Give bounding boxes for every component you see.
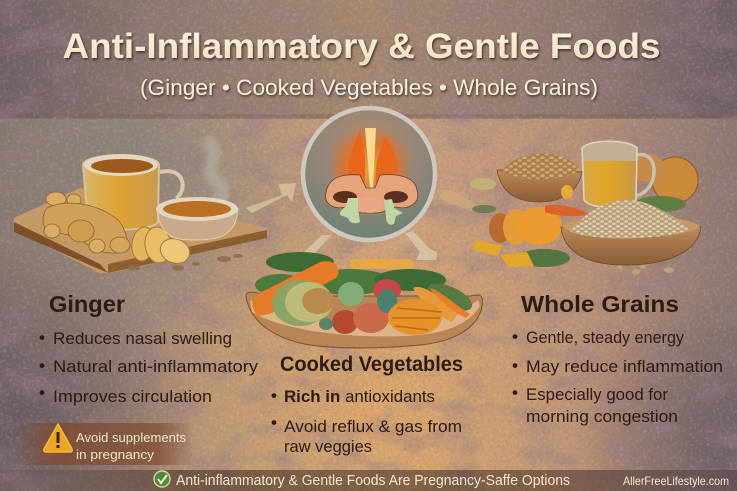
arrow: nose to vegetables right (405, 231, 437, 260)
nose (326, 175, 418, 213)
sweet potato and radish (319, 279, 401, 334)
cooked vegetables benefits: Rich in antioxidants (284, 387, 435, 406)
whole grains heading: Whole Grains (521, 291, 679, 317)
grain bowl front (561, 200, 701, 265)
board front edge (14, 222, 108, 273)
ginger benefits: • (39, 328, 45, 347)
whole grains benefits: • (512, 356, 518, 375)
cutting board (14, 188, 268, 273)
whole grains benefits: • (512, 383, 518, 402)
yellow squash stack (388, 299, 442, 335)
panel: ginger (39, 291, 259, 406)
carrots and orange vegetables (252, 259, 470, 322)
greens and yellow wedges (470, 178, 686, 267)
illustration: whole grains, tea and bread (470, 141, 701, 274)
bread (629, 154, 698, 203)
cooked vegetables heading: Cooked Vegetables (280, 353, 463, 376)
greens (255, 252, 476, 316)
whole grains benefits: Especially good for (526, 385, 668, 404)
footer banner (0, 470, 737, 491)
steam (205, 140, 224, 212)
squash slice (272, 280, 334, 326)
ginger slices (130, 225, 193, 267)
panel: cooked vegetables (271, 353, 463, 456)
plate (246, 292, 482, 348)
panel: whole grains (512, 291, 723, 426)
nose inflammation circle (303, 108, 435, 240)
tea mug (83, 154, 183, 230)
footer banner: Anti-inflammatory & Gentle Foods Are Pregnancy-Saffe Options (176, 473, 570, 489)
ginger benefits: Reduces nasal swelling (53, 329, 232, 348)
whole grains benefits: • (512, 327, 518, 346)
callout: supplement warning (22, 423, 194, 465)
subtitle: (Ginger • Cooked Vegetables • Whole Grains) (140, 75, 598, 100)
illustration: plate of cooked vegetables (246, 252, 482, 348)
ginger benefits: • (39, 356, 45, 375)
callout: supplement warning: Avoid supplements (76, 430, 186, 445)
cooked vegetables benefits: • (271, 413, 277, 432)
seeds (128, 254, 243, 270)
ginger heading: Ginger (49, 291, 125, 317)
bowl of grains behind (497, 154, 582, 202)
callout: supplement warning: in pregnancy (76, 447, 155, 462)
ginger root (43, 192, 130, 253)
arrow: nose to vegetables left (302, 235, 332, 256)
cooked vegetables benefits: raw veggies (284, 437, 372, 456)
glass mug of tea (582, 141, 654, 208)
icon: green check badge (154, 471, 170, 487)
cooked vegetables benefits: • (271, 386, 277, 405)
arrow: grains to nose (440, 190, 480, 212)
cooked vegetables benefits: Avoid reflux & gas from (284, 417, 462, 436)
illustration: ginger with tea (14, 140, 268, 273)
whole grains benefits: May reduce inflammation (526, 357, 723, 376)
arrow: ginger to nose (246, 183, 296, 213)
whole grains benefits: morning congestion (526, 407, 678, 426)
ginger benefits: Natural anti-inflammatory (53, 357, 259, 376)
green mucus drips (340, 198, 403, 225)
cooked vegetables benefits (271, 386, 462, 456)
whole grains benefits (512, 327, 723, 426)
flames (330, 116, 410, 200)
ginger benefits: • (39, 383, 45, 402)
whole grains benefits: Gentle, steady energy (526, 328, 684, 347)
sliced squash (489, 185, 588, 245)
small bowl of tea (156, 197, 238, 240)
icon: warning triangle (44, 424, 72, 452)
ginger benefits: Improves circulation (53, 387, 212, 406)
title: Anti-Inflammatory & Gentle Foods (62, 27, 660, 66)
ginger benefits (39, 328, 259, 406)
loose grains (617, 265, 674, 274)
